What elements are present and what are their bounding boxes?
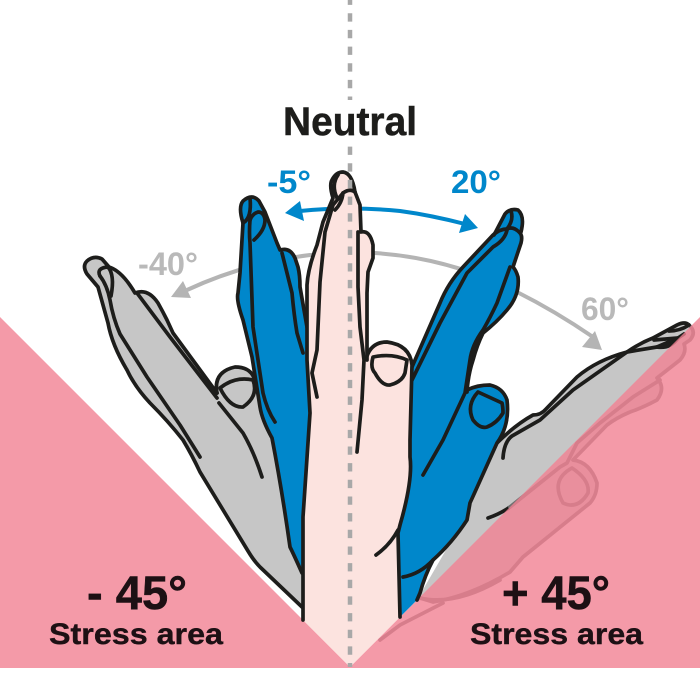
label: -40 degrees: -40° <box>138 246 198 282</box>
right stress area: +45 degrees <box>350 317 700 668</box>
right blue hand <box>398 210 523 617</box>
arrow: grey range of motion <box>171 253 602 350</box>
hand: blue positions <box>238 197 523 617</box>
centre line: dashed <box>348 0 352 667</box>
label: 20 degrees: 20° <box>451 164 501 200</box>
label: minus 45 degrees: - 45° <box>87 566 187 619</box>
label: plus 45 degrees: + 45° <box>502 566 610 619</box>
right grey hand <box>380 323 693 640</box>
label: 60 degrees: 60° <box>581 291 629 327</box>
arrow: blue range of motion <box>285 201 478 233</box>
hand: neutral position <box>303 172 412 667</box>
left blue hand <box>238 197 310 590</box>
text: left stress area: Stress area <box>49 618 223 651</box>
label: -5 degrees: -5° <box>267 164 311 200</box>
left stress area: -45 degrees <box>0 317 350 668</box>
title: Neutral: Neutral <box>283 100 417 144</box>
hand: grey extreme positions <box>84 257 693 640</box>
left grey hand <box>84 257 303 620</box>
text: right stress area: Stress area <box>470 618 643 651</box>
